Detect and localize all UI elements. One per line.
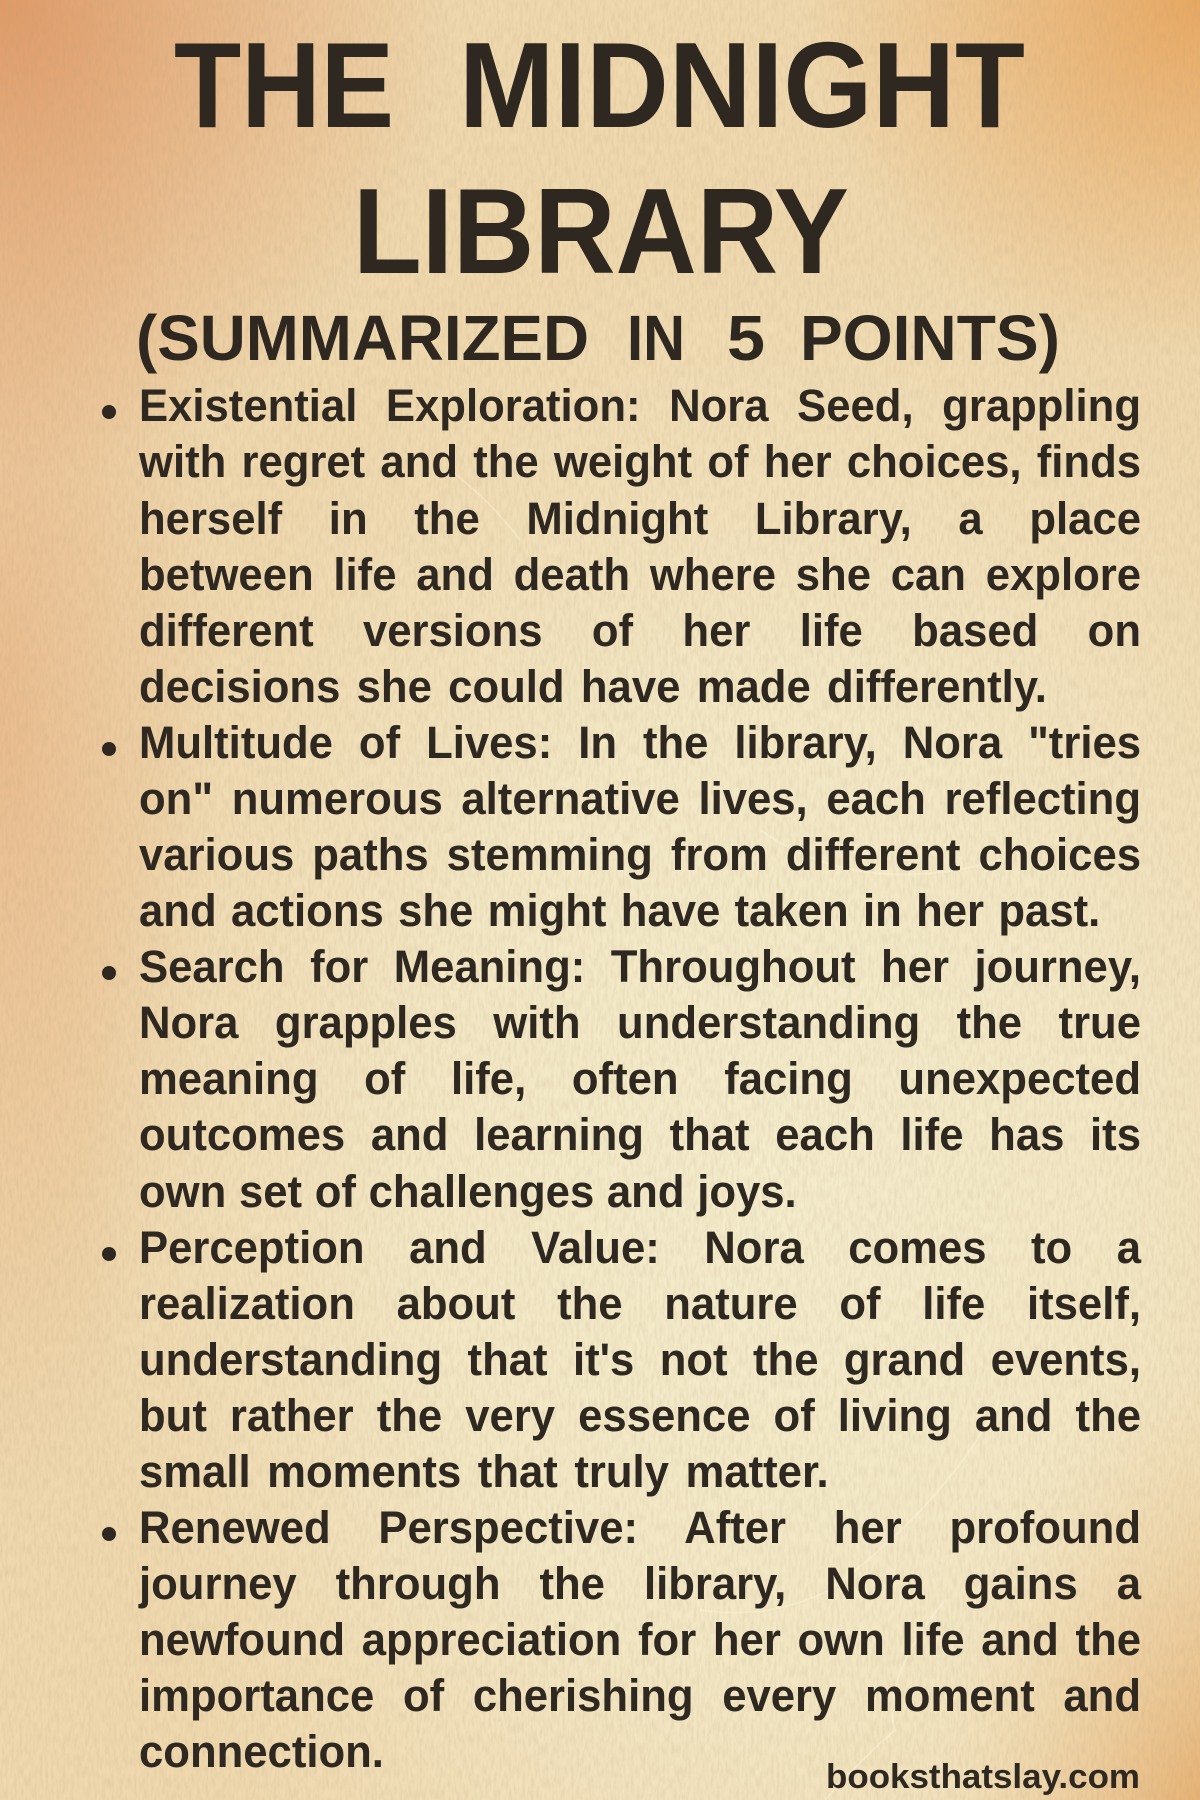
point 2: multitude of lives bbox=[102, 717, 1141, 936]
point 3: search for meaning: Nora grapples with understanding the true bbox=[139, 997, 1141, 1048]
title line 1 bbox=[174, 17, 1025, 153]
point 1: existential exploration: between life and death where she can explore bbox=[139, 549, 1141, 600]
point 1: existential exploration: decisions she could have made differently. bbox=[139, 661, 1047, 712]
point 4: perception and value: small moments that truly matter. bbox=[139, 1446, 829, 1497]
title line 1: THE bbox=[174, 17, 394, 153]
point 5: renewed perspective: newfound appreciation for her own life and the bbox=[139, 1614, 1141, 1665]
point 5: renewed perspective: importance of cherishing every moment and bbox=[139, 1670, 1141, 1721]
point 3: search for meaning bbox=[102, 941, 1141, 1216]
point 2: multitude of lives: and actions she might have taken in her past. bbox=[139, 885, 1100, 936]
footer: website credit: booksthatslay.com bbox=[826, 1758, 1140, 1796]
point 3: search for meaning: outcomes and learning that each life has its bbox=[139, 1109, 1141, 1160]
point 5: renewed perspective bbox=[102, 1502, 1142, 1777]
point 2: multitude of lives: various paths stemming from different choices bbox=[139, 829, 1141, 880]
subtitle: 5 bbox=[727, 302, 765, 374]
point 3: search for meaning: meaning of life, often facing unexpected bbox=[139, 1053, 1141, 1104]
point 1: existential exploration bbox=[102, 380, 1141, 712]
point 2: multitude of lives: on" numerous alternative lives, each reflecting bbox=[139, 773, 1141, 824]
point 1: existential exploration: with regret and the weight of her choices, finds bbox=[139, 436, 1141, 487]
point 1: existential exploration: herself in the Midnight Library, a place bbox=[139, 493, 1141, 544]
subtitle bbox=[136, 302, 1060, 374]
title line 2: LIBRARY bbox=[353, 163, 849, 299]
point 3: search for meaning: own set of challenges and joys. bbox=[139, 1166, 797, 1216]
point 5: renewed perspective: journey through the library, Nora gains a bbox=[139, 1558, 1141, 1609]
subtitle: IN bbox=[627, 302, 685, 374]
point 1: existential exploration: Existential Exploration: Nora Seed, grappling bbox=[139, 380, 1141, 431]
title line 1: MIDNIGHT bbox=[459, 17, 1025, 153]
subtitle: POINTS) bbox=[800, 302, 1060, 374]
point 1: existential exploration: different versions of her life based on bbox=[139, 605, 1141, 656]
point 4: perception and value: understanding that it's not the grand events, bbox=[139, 1334, 1141, 1385]
headings bbox=[136, 17, 1060, 374]
point 5: renewed perspective: Renewed Perspective: After her profound bbox=[139, 1502, 1141, 1553]
point 4: perception and value: Perception and Value: Nora comes to a bbox=[139, 1222, 1141, 1273]
point 2: multitude of lives: Multitude of Lives: In the library, Nora "tries bbox=[139, 717, 1141, 768]
subtitle: (SUMMARIZED bbox=[136, 302, 589, 374]
point 4: perception and value: but rather the very essence of living and the bbox=[139, 1390, 1141, 1441]
point 4: perception and value: realization about the nature of life itself, bbox=[139, 1278, 1141, 1329]
point 5: renewed perspective: connection. bbox=[139, 1726, 384, 1777]
point 3: search for meaning: Search for Meaning: Throughout her journey, bbox=[139, 941, 1141, 992]
point 4: perception and value bbox=[102, 1222, 1142, 1497]
